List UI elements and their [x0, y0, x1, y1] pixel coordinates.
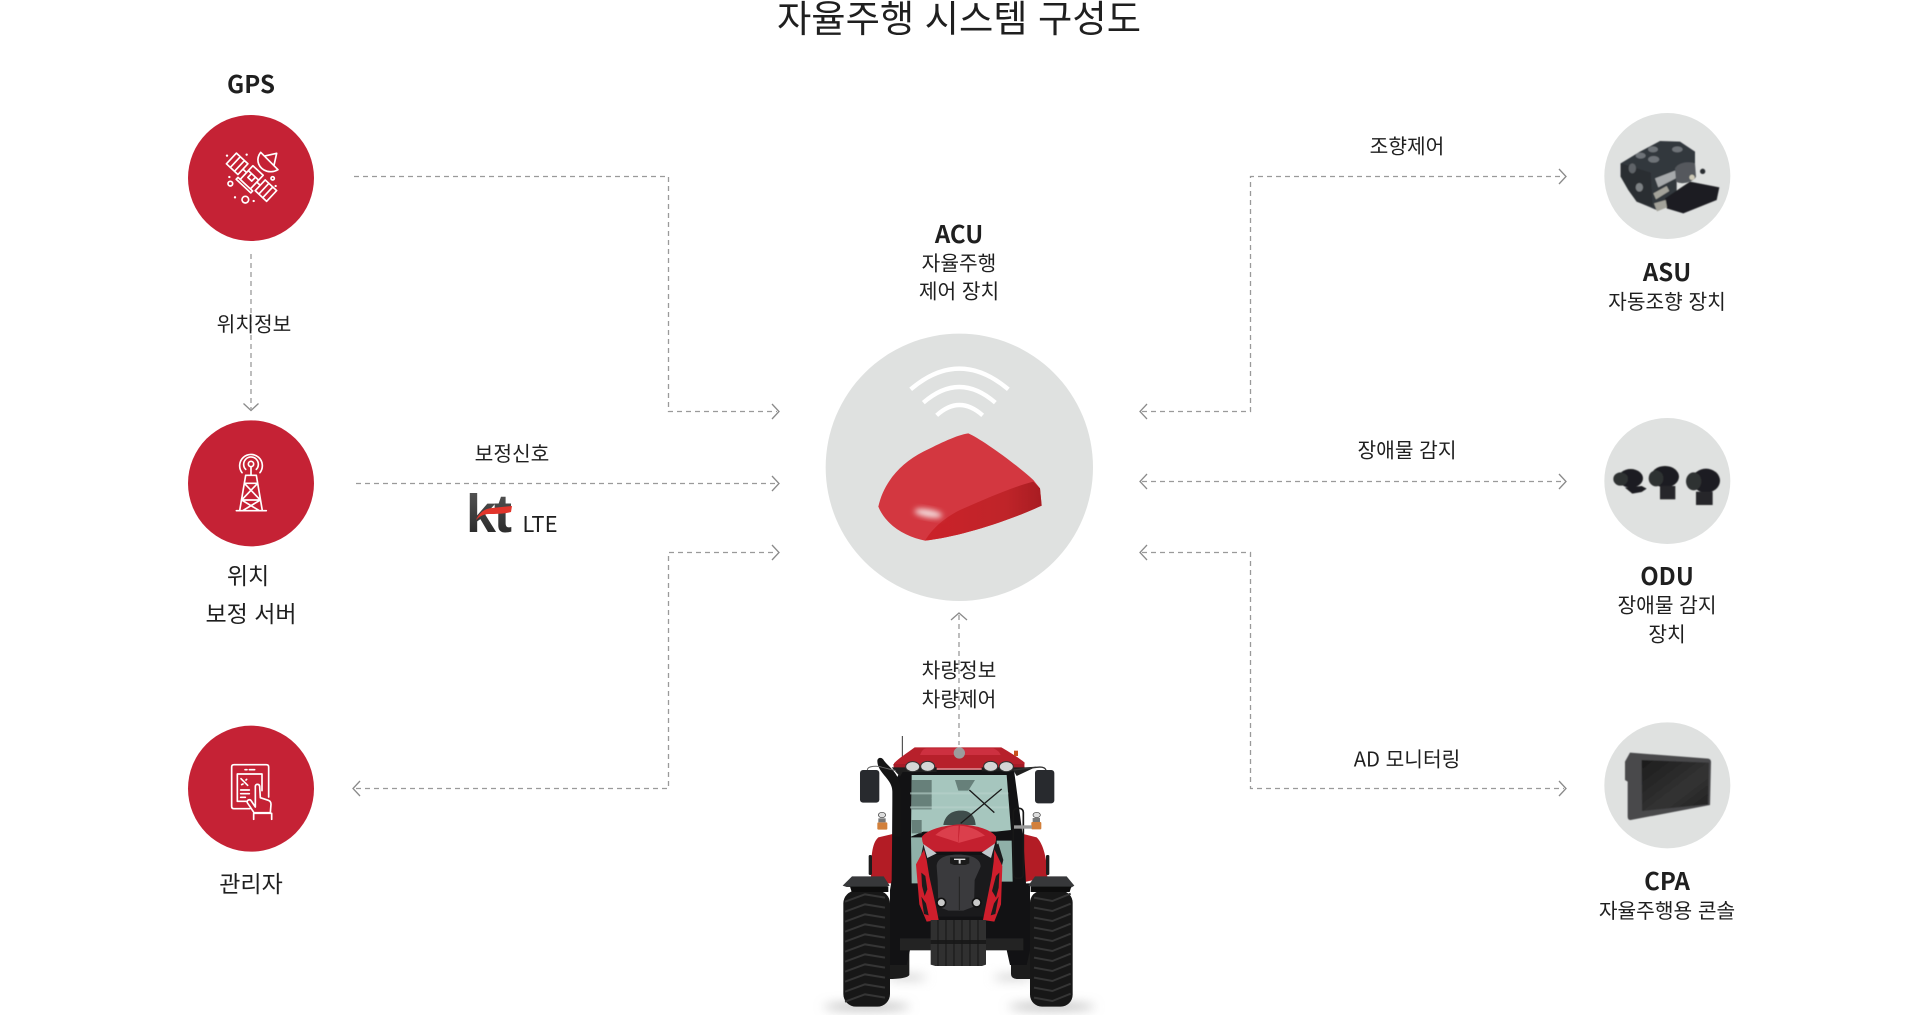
icon: correction server tower circle [188, 420, 314, 546]
label: ODU description: 장애물 감지 [1618, 588, 1716, 618]
front grille [920, 843, 1003, 917]
axle [900, 938, 1023, 950]
panel: ODU device circle [1604, 418, 1730, 544]
hood [922, 824, 996, 852]
connector: ACU and ODU [1140, 474, 1566, 489]
label: ACU description: 제어 장치 [919, 274, 999, 304]
logo: kt LTE [466, 484, 558, 544]
label: steering control: 조향제어 [1370, 130, 1444, 160]
front weights [931, 920, 986, 966]
connector: GPS to ACU [354, 176, 779, 419]
label: ASU description: 자동조향 장치 [1608, 285, 1726, 315]
label: operator: 관리자 [219, 865, 283, 899]
right front tyre [1030, 891, 1073, 1007]
console monitor [1625, 753, 1711, 820]
icon: wireless signal [911, 369, 1008, 415]
connector: tractor to ACU [951, 613, 967, 745]
label: obstacle detection: 장애물 감지 [1358, 434, 1456, 464]
icon: GPS satellite circle [188, 115, 314, 241]
side lamps [877, 812, 1041, 830]
label: ACU description: 자율주행 [922, 246, 996, 276]
logo: kt LTE: LTE [522, 507, 558, 539]
front fenders [843, 876, 890, 887]
antenna [901, 736, 904, 757]
heading: ASU: ASU [1642, 253, 1691, 288]
ACU antenna unit [878, 433, 1042, 541]
icon: operator tablet circle [188, 726, 314, 852]
label: AD monitoring: AD 모니터링 [1354, 742, 1460, 772]
panel: CPA device circle [1604, 722, 1730, 848]
work lights [906, 761, 1013, 772]
heading: CPA: CPA [1644, 862, 1691, 897]
mirrors [867, 766, 896, 771]
cab and chassis [890, 770, 1030, 965]
panel: ACU device circle [826, 334, 1093, 601]
label: ODU description: 장치 [1648, 618, 1686, 648]
connector: ACU to CPA [1140, 545, 1566, 796]
connector: operator and ACU [353, 545, 779, 796]
label: correction server: 위치 [227, 557, 269, 591]
tractor illustration [823, 736, 1095, 1010]
label: CPA description: 자율주행용 콘솔 [1599, 894, 1735, 924]
label: ACU description [919, 246, 999, 304]
panel: ASU device circle [1604, 113, 1730, 239]
connector: ACU to ASU [1140, 169, 1566, 419]
label: correction server: 보정 서버 [205, 595, 297, 629]
label: vehicle info and control: 차량정보 [922, 654, 996, 684]
heading: ODU: ODU [1640, 557, 1694, 592]
obstacle sensors [1613, 466, 1720, 505]
label: correction signal: 보정신호 [475, 437, 549, 467]
label: location info: 위치정보 [217, 308, 291, 338]
connector: correction signal [356, 476, 779, 491]
left front tyre [843, 891, 890, 1007]
rear tyres and fenders [890, 950, 1030, 979]
heading: GPS: GPS [227, 65, 275, 100]
label: correction server [205, 557, 297, 629]
label: ODU description [1618, 588, 1716, 648]
cab glass [911, 775, 1011, 837]
connector: GPS to correction server [244, 254, 258, 410]
label: vehicle info and control: 차량제어 [922, 682, 996, 712]
steering unit [1621, 141, 1719, 213]
heading: ACU: ACU [934, 215, 983, 250]
label: vehicle info and control [922, 654, 996, 712]
front red panels [916, 849, 939, 922]
roof [894, 747, 1025, 769]
exhaust [877, 758, 901, 837]
logo: kt LTE: kt [466, 484, 512, 544]
